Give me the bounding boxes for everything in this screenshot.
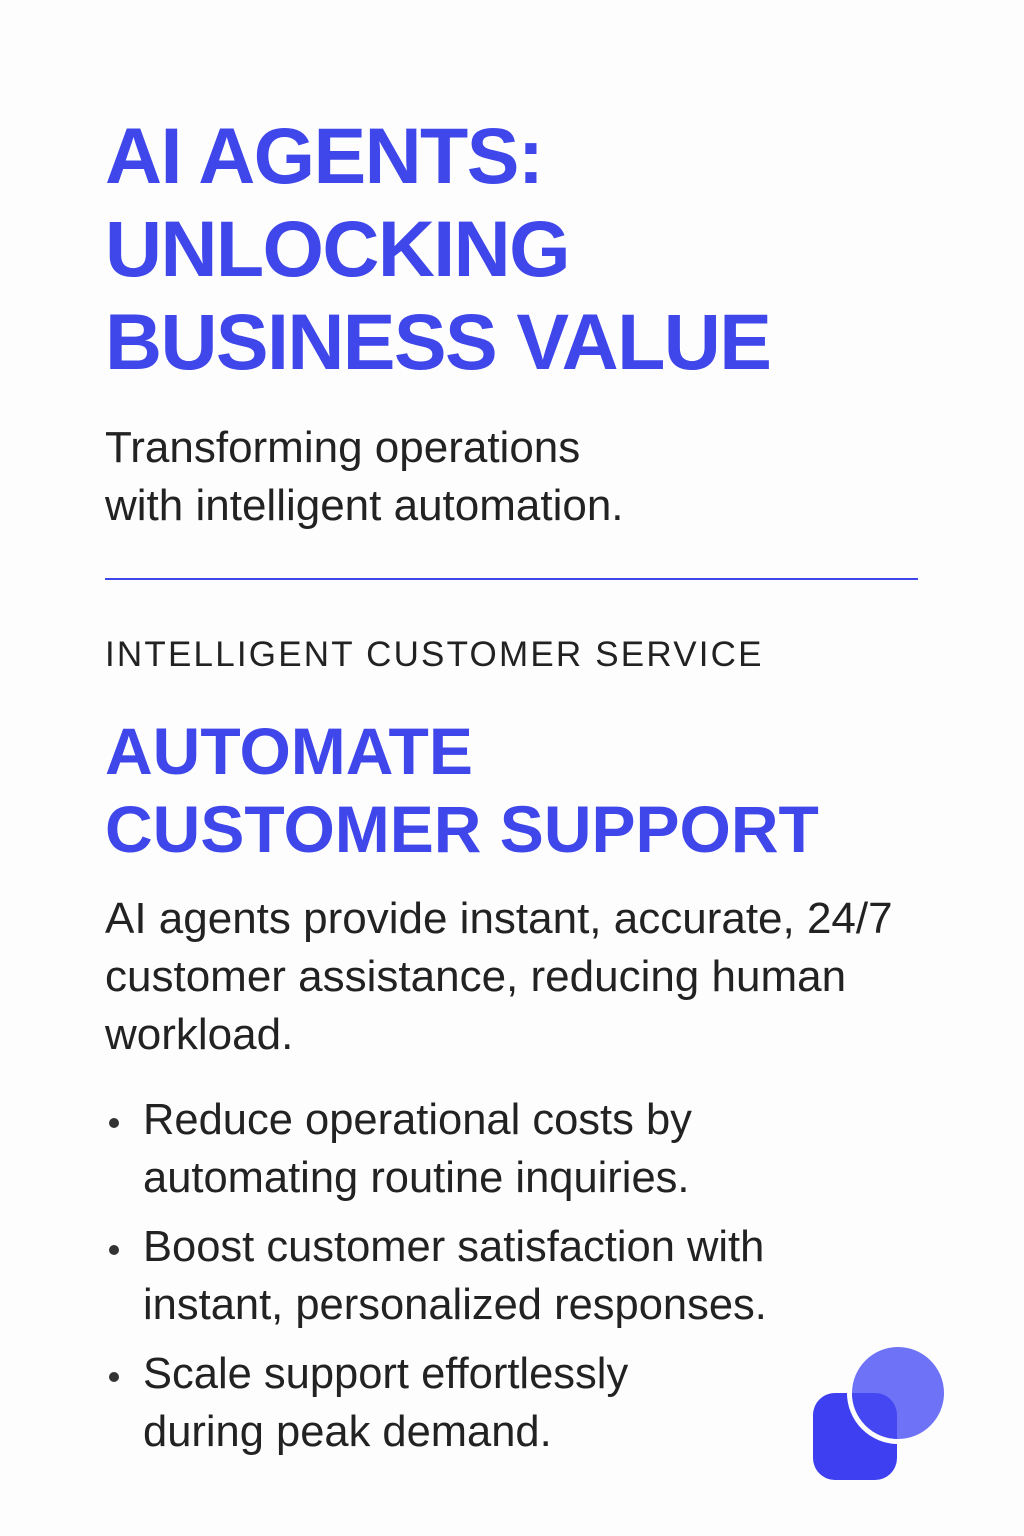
bullet list: Boost customer satisfaction with	[143, 1223, 764, 1271]
description: AI agents provide instant, accurate, 24/7	[105, 894, 893, 943]
title: UNLOCKING	[105, 204, 569, 293]
description: workload.	[105, 1010, 293, 1059]
subtitle: Transforming operations	[105, 423, 580, 472]
bullet list: Scale support effortlessly	[143, 1350, 628, 1398]
bullet list: Reduce operational costs by	[143, 1096, 692, 1144]
section label: INTELLIGENT CUSTOMER SERVICE	[105, 635, 764, 674]
section heading	[105, 714, 819, 866]
section heading: CUSTOMER SUPPORT	[105, 792, 819, 866]
title: AI AGENTS:	[105, 111, 543, 200]
description: customer assistance, reducing human	[105, 952, 846, 1001]
bullet list: automating routine inquiries.	[143, 1154, 690, 1202]
title	[105, 111, 770, 386]
title: BUSINESS VALUE	[105, 297, 770, 386]
subtitle: with intelligent automation.	[105, 481, 624, 530]
bullet list: instant, personalized responses.	[143, 1281, 767, 1329]
bullet list	[109, 1096, 767, 1456]
description	[105, 894, 893, 1059]
bullet list: during peak demand.	[143, 1408, 552, 1456]
icon: logo	[813, 1347, 944, 1480]
subtitle	[105, 423, 624, 530]
section heading: AUTOMATE	[105, 714, 473, 788]
